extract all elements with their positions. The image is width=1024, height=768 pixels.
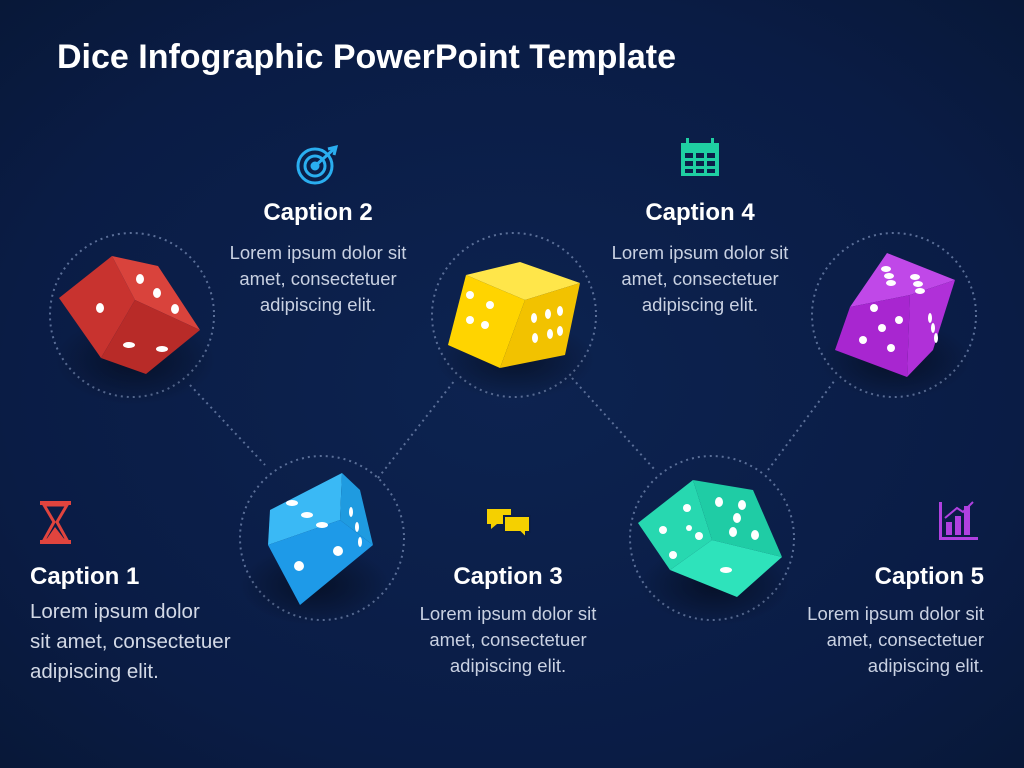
icon: chart (939, 502, 978, 540)
connectors (50, 233, 976, 620)
icon: hourglass (40, 501, 71, 544)
caption 4: Lorem ipsum dolor sit (612, 242, 788, 263)
caption 3: Caption 3 (453, 563, 563, 590)
die: yellow (435, 262, 595, 400)
caption 1 (30, 563, 231, 683)
caption 3: amet, consectetuer (429, 629, 587, 650)
caption 3 (420, 563, 596, 676)
caption 2: adipiscing elit. (260, 294, 376, 315)
die: blue (240, 473, 390, 625)
icon: calendar (681, 138, 719, 176)
die: green (638, 480, 790, 625)
die: purple (820, 253, 970, 400)
caption 5 (807, 563, 984, 676)
icon: target (298, 147, 336, 183)
caption 5: adipiscing elit. (868, 655, 984, 676)
caption 1: Caption 1 (30, 563, 139, 590)
caption 2: Lorem ipsum dolor sit (230, 242, 406, 263)
caption 1: sit amet, consectetuer (30, 630, 231, 653)
caption 4: Caption 4 (645, 199, 755, 226)
caption 5: amet, consectetuer (827, 629, 984, 650)
caption 5: Caption 5 (875, 563, 984, 590)
caption 4: adipiscing elit. (642, 294, 758, 315)
caption 2: amet, consectetuer (239, 268, 397, 289)
caption 2: Caption 2 (263, 199, 373, 226)
caption 4 (612, 199, 788, 315)
caption 3: Lorem ipsum dolor sit (420, 603, 596, 624)
caption 3: adipiscing elit. (450, 655, 566, 676)
caption 1: Lorem ipsum dolor (30, 600, 200, 623)
icon: chat (487, 509, 530, 538)
caption 5: Lorem ipsum dolor sit (807, 603, 984, 624)
caption 4: amet, consectetuer (621, 268, 779, 289)
caption 2 (230, 199, 406, 315)
die: red (55, 256, 215, 405)
title: Dice Infographic PowerPoint Template (57, 38, 676, 76)
caption 1: adipiscing elit. (30, 660, 159, 683)
